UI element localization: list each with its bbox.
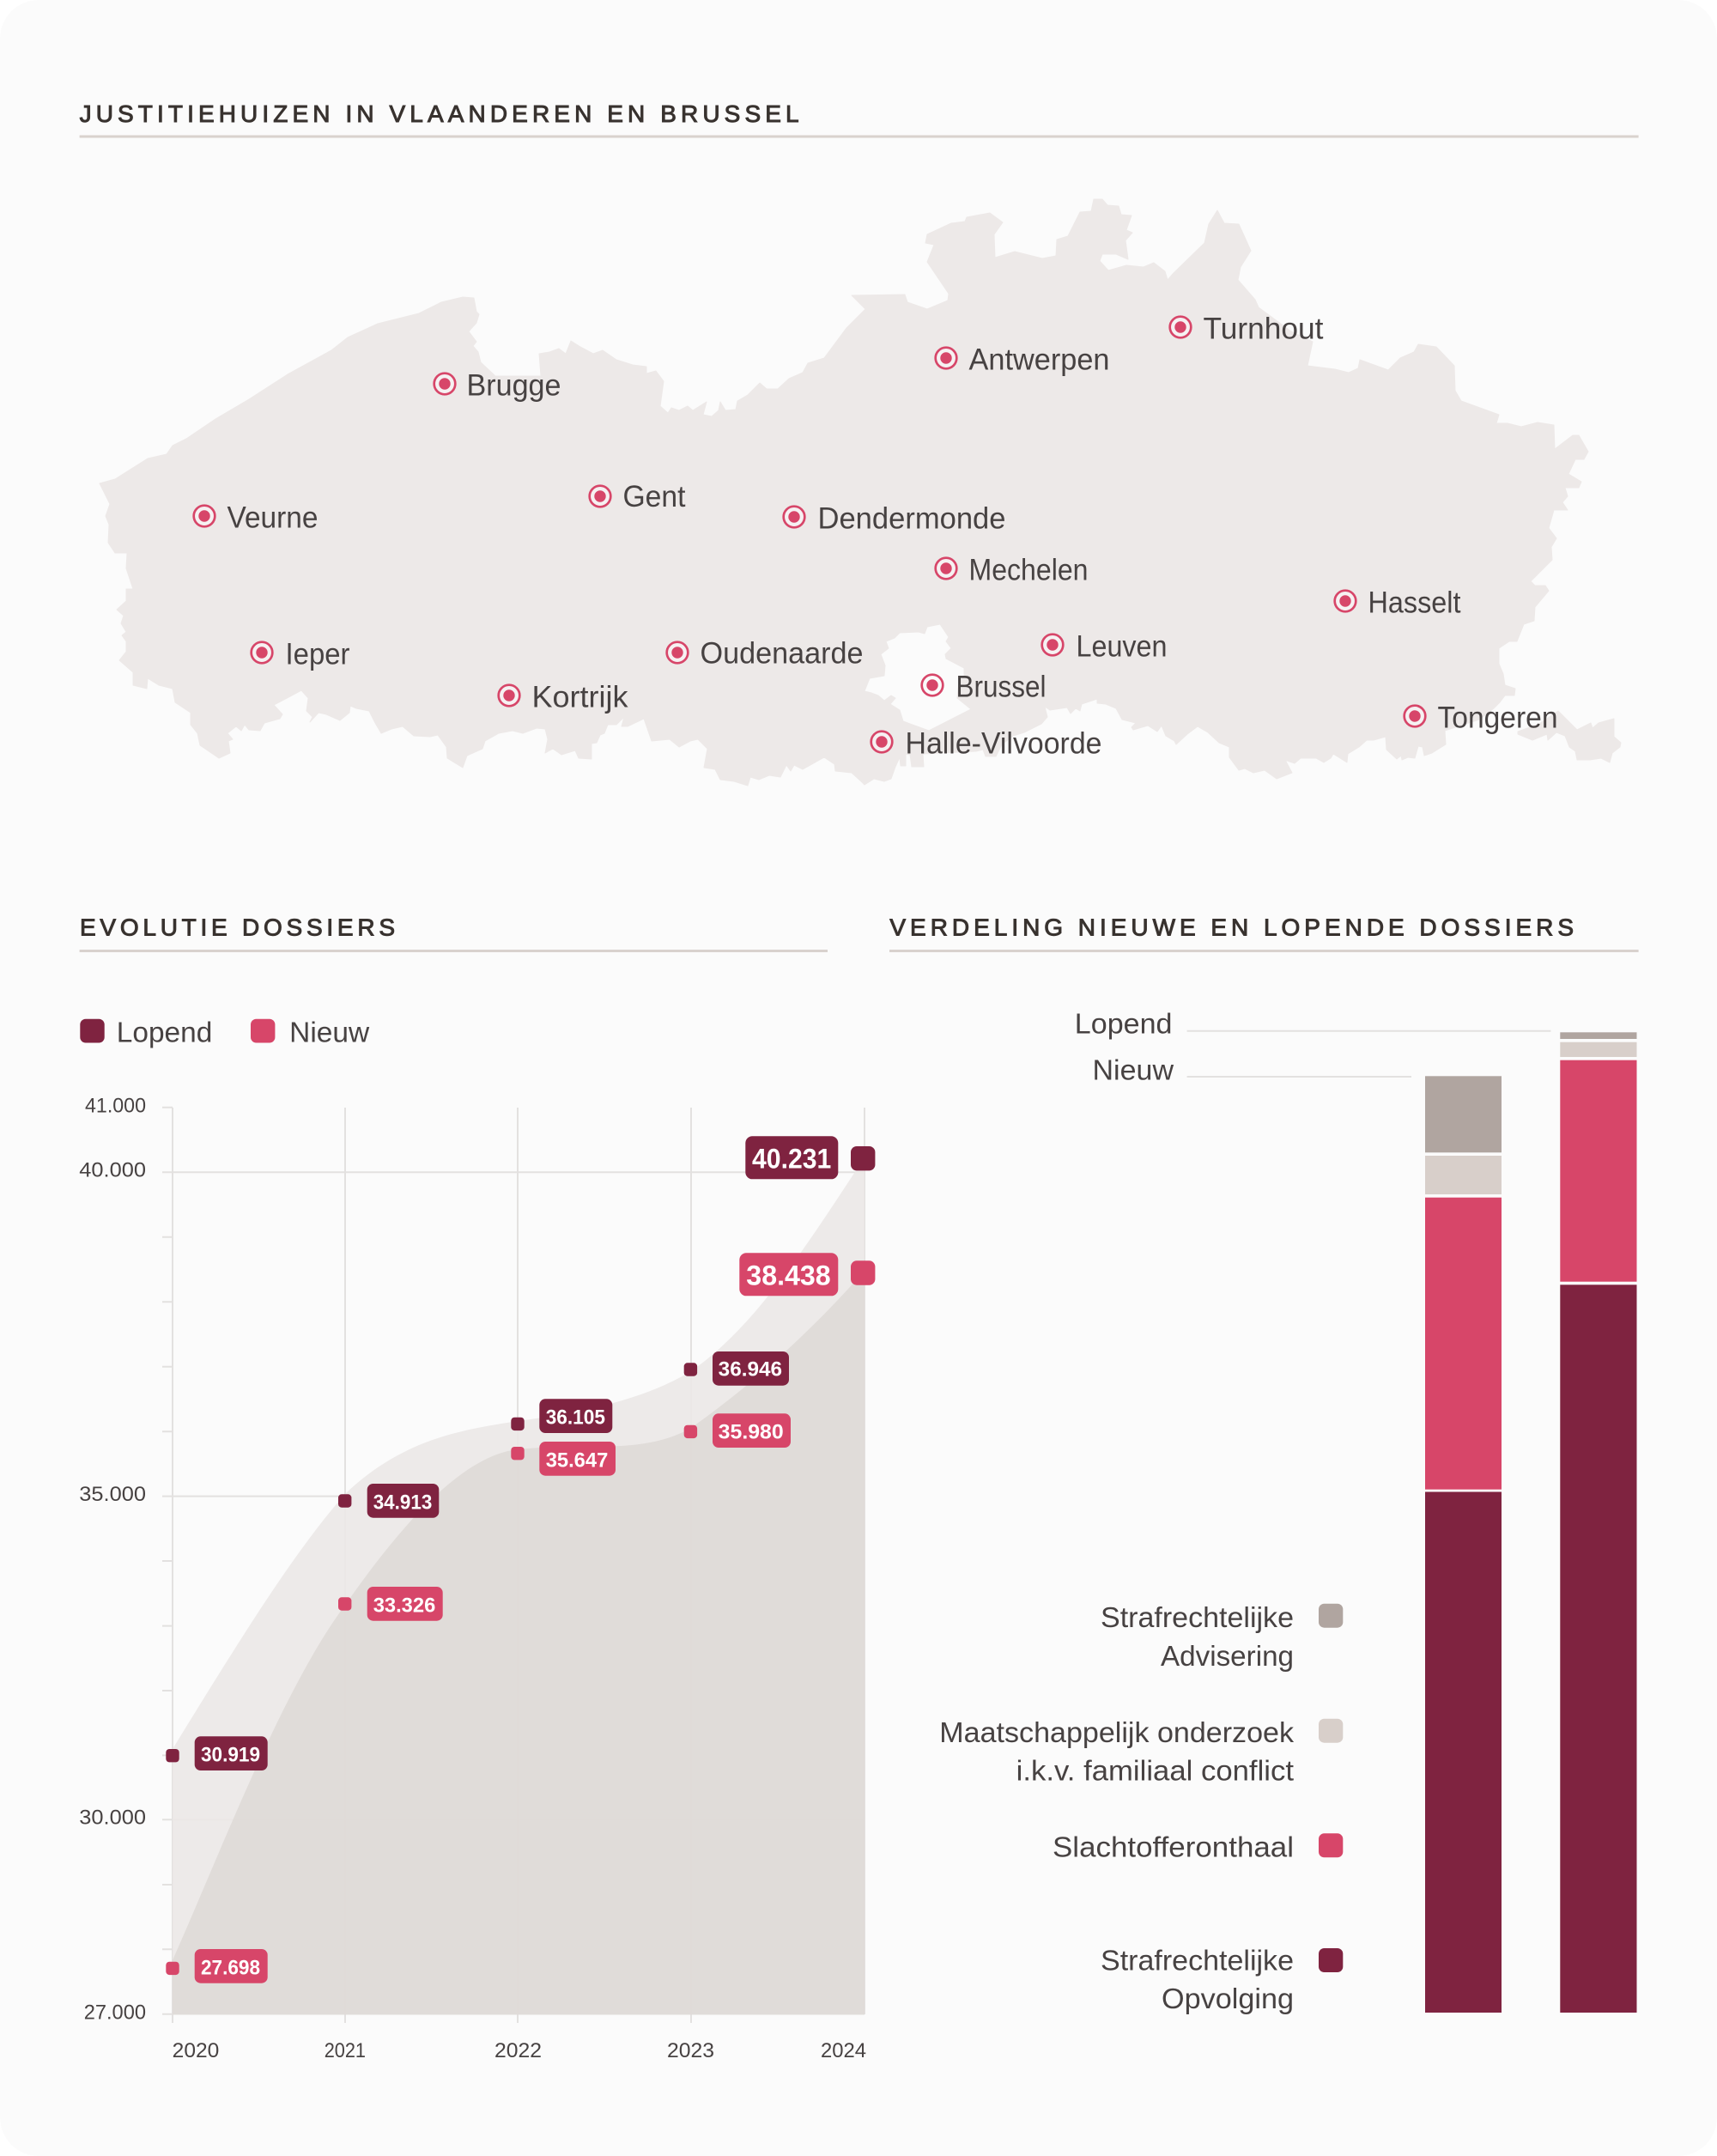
data point: 2023 lopend 36.946: 36.946 [719,1358,782,1382]
data point: 2020 nieuw 27.698 [166,1949,268,1983]
legend: strafrechtelijke advisering: Strafrechtelijke [1101,1601,1294,1633]
data point: 2022 nieuw 35.647 [511,1442,616,1476]
marker: Dendermonde: Dendermonde [817,501,1006,536]
bar label: nieuw: Nieuw [1092,1054,1174,1085]
legend: strafrechtelijke opvolging: Opvolging [1162,1983,1294,2014]
marker: Hasselt: Hasselt [1368,586,1461,620]
marker: Gent [590,480,686,513]
marker: Turnhout: Turnhout [1204,313,1324,345]
y axis labels: 40.000 [79,1159,146,1182]
heading: verdeling: VERDELING NIEUWE EN LOPENDE DOSSIERS [889,914,1574,941]
marker: Ieper: Ieper [285,637,350,671]
data point: 2021 lopend 34.913: 34.913 [373,1491,432,1514]
data point: 2020 lopend 30.919 [166,1736,268,1770]
data point: 2022 nieuw 35.647: 35.647 [546,1448,608,1472]
marker: Brussel [922,670,1046,704]
data point: 2020 nieuw 27.698: 27.698 [201,1956,260,1979]
data point: 2020 lopend 30.919: 30.919 [201,1744,260,1767]
marker: Leuven: Leuven [1077,630,1168,663]
y axis labels: 41.000 [85,1094,146,1117]
legend: lopend and nieuw [80,1016,369,1048]
stacked bar: lopend [1560,1032,1636,2013]
legend: lopend and nieuw: Nieuw [289,1016,369,1048]
marker: Oudenaarde: Oudenaarde [701,637,864,670]
marker: Halle-Vilvoorde: Halle-Vilvoorde [905,726,1102,761]
marker: Brussel: Brussel [956,670,1046,704]
x axis labels: 2021 [325,2039,366,2062]
data point: 2024 lopend 40.231 [745,1136,875,1179]
heading: justitiehuizen: JUSTITIEHUIZEN IN VLAANDEREN EN BRUSSEL [80,100,799,127]
x axis labels: 2020 [173,2039,219,2062]
y axis labels [79,1094,146,2025]
area: nieuw [173,1271,865,2014]
marker: Hasselt [1335,586,1461,620]
y axis labels: 30.000 [79,1807,146,1830]
marker: Tongeren: Tongeren [1437,701,1557,735]
data point: 2022 lopend 36.105: 36.105 [546,1406,605,1429]
legend: maatschappelijk onderzoek [939,1716,1343,1786]
panel: evolutie dossiers [79,914,875,2062]
panel: map of justice houses [80,100,1639,786]
y axis labels: 27.000 [84,2001,146,2025]
data point: 2021 nieuw 33.326: 33.326 [373,1594,435,1617]
data point: 2023 nieuw 35.980: 35.980 [719,1421,784,1444]
y axis, gridlines and x axis [162,1108,865,2023]
legend: strafrechtelijke opvolging [1101,1944,1343,2014]
marker: Brugge: Brugge [467,369,561,402]
data point: 2024 lopend 40.231: 40.231 [752,1144,831,1175]
marker: Kortrijk: Kortrijk [532,680,628,714]
heading: evolutie dossiers: EVOLUTIE DOSSIERS [80,914,395,941]
marker: Antwerpen: Antwerpen [968,343,1109,376]
panel: verdeling nieuwe en lopende dossiers [889,914,1639,2014]
legend: strafrechtelijke opvolging: Strafrechtelijke [1101,1944,1294,1976]
data point: 2021 lopend 34.913 [338,1484,439,1518]
data point: 2024 nieuw 38.438 [739,1253,875,1296]
legend: lopend and nieuw: Lopend [117,1016,212,1048]
data point: 2023 nieuw 35.980 [684,1413,791,1448]
data point: 2024 nieuw 38.438: 38.438 [746,1260,831,1291]
data point: 2021 nieuw 33.326 [338,1587,443,1621]
x axis labels: 2022 [494,2039,542,2062]
marker: Leuven [1042,630,1168,663]
legend: maatschappelijk onderzoek: i.k.v. familiaal conflict [1016,1754,1294,1786]
marker: Ieper [252,637,350,671]
legend: strafrechtelijke advisering [1101,1601,1343,1672]
marker: Mechelen: Mechelen [968,553,1089,587]
legend: maatschappelijk onderzoek: Maatschappelijk onderzoek [939,1716,1295,1748]
x axis labels [173,2039,866,2062]
stacked bar: nieuw [1425,1076,1502,2013]
y axis labels: 35.000 [79,1483,146,1506]
x axis labels: 2024 [821,2039,866,2062]
marker: Veurne: Veurne [227,501,318,534]
x axis labels: 2023 [667,2039,714,2062]
bar label: lopend: Lopend [1075,1007,1173,1039]
map: Flanders shape [100,199,1621,786]
data point: 2023 lopend 36.946 [684,1351,789,1386]
area: lopend [173,1157,865,2014]
data point: 2022 lopend 36.105 [511,1399,612,1433]
legend: slachtofferonthaal: Slachtofferonthaal [1053,1831,1294,1863]
legend: strafrechtelijke advisering: Advisering [1161,1640,1294,1672]
marker: Gent: Gent [623,480,686,513]
